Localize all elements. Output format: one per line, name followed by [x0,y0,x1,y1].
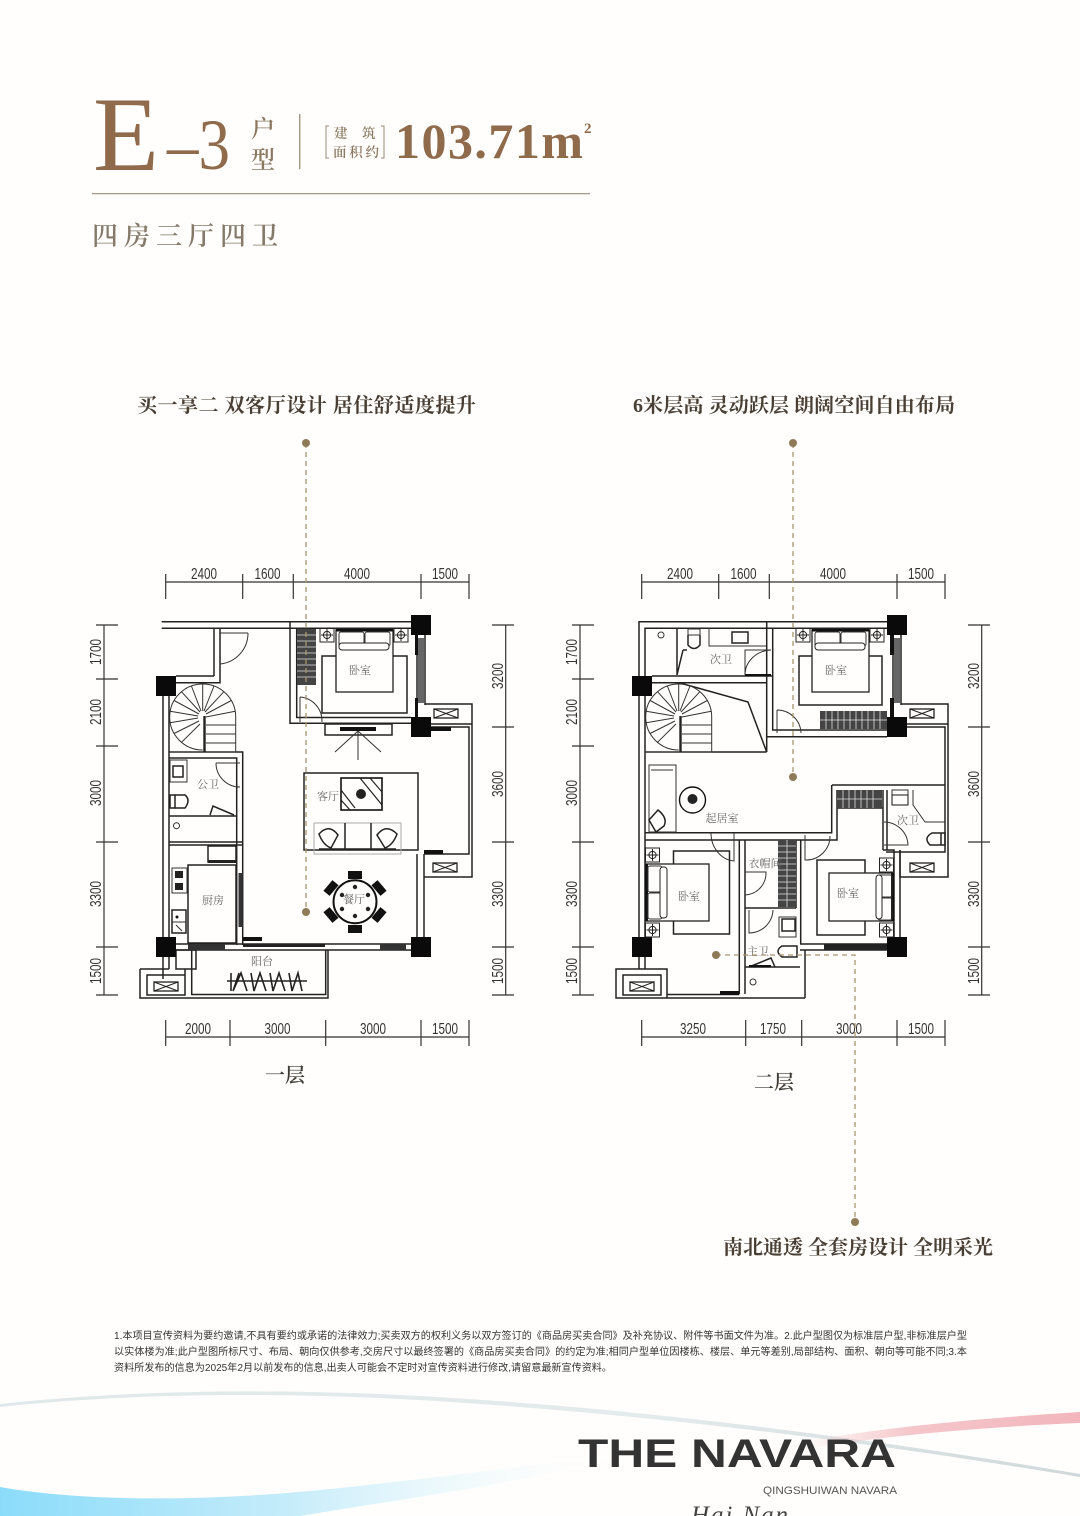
dimensions: top: 4000 [820,566,846,583]
heading: first floor feature: 买一享二 双客厅设计 居住舒适度提升 [137,393,476,417]
spiral stairs [170,684,236,752]
disclaimer: 以实体楼为准;此户型图所标尺寸、布局、朝向仅供参考,交房尺寸以最终签署的《商品房买卖合同》的约定为准;相同户型单位因楼栋、楼层、单元等差别,局部结构、面积、朝向等可能不同;3.本 [114,1345,967,1358]
room labels: 主卫 [747,945,769,958]
spiral stairs [646,684,712,752]
family room furniture [649,765,706,832]
kitchen fixtures [172,846,236,943]
logo [578,1432,898,1516]
disclaimer: 1.本项目宣传资料为要约邀请,不具有要约或承诺的法律效力;买卖双方的权利义务以双方签订的《商品房买卖合同》及补充协议、附件等书面文件为准。2.此户型图仅为标准层户型,非标准层户型 [114,1329,967,1342]
bedroom furniture [297,628,408,760]
room labels: 厨房 [202,893,224,907]
dimensions: top: 2400 [667,566,693,583]
dimensions: bottom [642,1020,945,1046]
dimensions: right: 1500 [966,958,983,984]
structural columns [156,615,431,957]
room labels: 衣帽间 [748,856,782,870]
room labels: 卧室 [837,886,859,900]
walls [140,622,472,998]
leader: ventilation [712,951,859,1226]
floor label: 二层 [754,1071,795,1094]
dimensions: top: 1500 [908,566,934,583]
room labels: 卧室 [349,663,371,677]
lower right bedroom furniture [805,835,894,937]
dimensions: top: 1600 [254,566,281,583]
room labels: 公卫 [197,778,219,791]
dimensions: bottom: 2000 [185,1021,211,1038]
area value: 103.71m [395,113,583,169]
dimensions: right: 1500 [490,958,507,984]
heading: ventilation feature: 南北通透 全套房设计 全明采光 [723,1235,993,1259]
area label [326,125,384,160]
room labels: 次卫 [710,652,732,666]
dimensions: bottom: 3000 [836,1021,862,1038]
dimensions: top: 2400 [191,566,217,583]
entry door [220,633,248,664]
room labels [197,663,371,968]
vertical rule [299,114,300,169]
dimensions: left: 3000 [564,780,581,806]
logo: THE NAVARA [578,1432,896,1476]
area superscript: 2 [584,121,592,137]
area label: 筑 [362,126,376,141]
dimensions: bottom: 3000 [360,1021,386,1038]
dimensions: bottom: 1500 [432,1021,458,1038]
unit number: –3 [166,105,230,185]
dimensions: left: 3000 [88,780,105,806]
dimensions: left: 1700 [88,639,105,665]
dimensions: left [564,625,594,995]
room labels: 餐厅 [343,892,365,906]
dimensions: right [490,625,514,995]
dimensions: right: 3600 [966,771,983,797]
floor label: 一层 [265,1064,306,1087]
upper bedroom furniture [777,628,887,733]
area label: 建 [334,125,348,141]
title block [93,76,592,193]
dimensions: right: 3300 [966,881,983,907]
living room furniture [304,773,418,854]
structural columns [632,615,907,957]
dimensions: left: 1500 [564,958,581,984]
unit type label: 型 [251,147,275,174]
room labels: 次卫 [897,813,919,827]
dimensions: bottom: 1500 [908,1021,934,1038]
dimensions: left: 1500 [88,958,105,984]
dimensions: right: 3300 [490,881,507,907]
heading: second floor feature: 6米层高 灵动跃层 朗阔空间自由布局 [633,393,955,417]
dimensions: left: 3300 [564,881,581,907]
dimensions: right: 3200 [966,663,983,689]
area label: 面积约 [333,144,380,160]
room labels: 起居室 [706,811,738,825]
dimensions: right [966,625,990,995]
dining table [323,871,387,933]
unit type label [251,116,275,174]
unit type label: 户 [251,116,275,143]
dimensions: top: 1600 [730,566,757,583]
subtitle: 四房三厅四卫 [92,222,284,251]
room labels: 阳台 [251,955,273,968]
walk-in closet and ensuite [745,840,797,985]
dimensions: bottom: 3000 [264,1021,291,1038]
AC units [630,709,934,991]
dimensions: bottom: 1750 [760,1021,786,1038]
dimensions: left: 3300 [88,881,105,907]
floor plan: first floor [88,566,514,1087]
dimensions: left: 2100 [88,699,105,725]
disclaimer [114,1329,967,1374]
second bathroom fixtures [837,790,945,845]
dimensions: top: 4000 [344,566,370,583]
dimensions: left [88,625,118,995]
decorative waves [0,1391,1080,1516]
lower left bedroom furniture [645,833,734,937]
room labels: 客厅 [317,789,339,803]
walls [616,622,948,998]
dimensions: top: 1500 [432,566,458,583]
logo: QINGSHUIWAN NAVARA [763,1485,898,1497]
balcony drying rack [227,973,307,991]
dimensions: left: 1700 [564,639,581,665]
dimensions: left: 2100 [564,699,581,725]
dimensions: top [642,566,945,599]
unit letter: E [93,76,159,193]
room labels: 卧室 [825,663,847,677]
leader: second floor [789,439,797,781]
dimensions: bottom [166,1020,469,1046]
public bathroom fixtures [170,760,240,829]
dimensions: right: 3200 [490,663,507,689]
upper bathroom fixtures [658,628,771,676]
room labels: 卧室 [678,889,700,903]
disclaimer: 资料所发布的信息为2025年2月以前发布的信息,出卖人可能会不定时对宣传资料进行修改,请留意最新宣传资料。 [114,1361,612,1374]
room labels [678,652,919,958]
dimensions: bottom: 3250 [680,1021,706,1038]
leader: first floor [302,439,310,916]
title divider [92,193,590,194]
dimensions: right: 3600 [490,771,507,797]
floor plan: second floor [564,566,990,1094]
AC units [154,709,458,991]
dimensions: top [166,566,469,599]
